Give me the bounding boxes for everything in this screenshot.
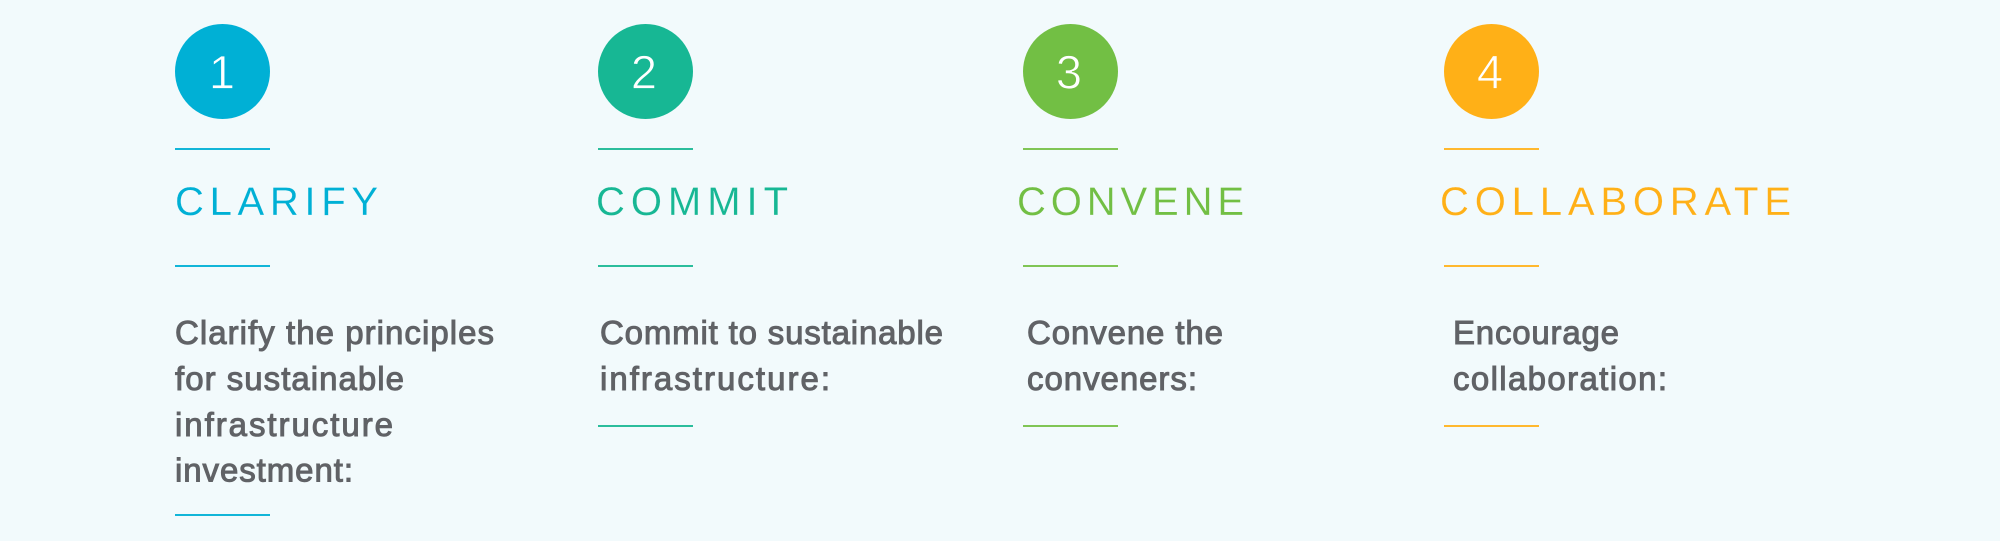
text: collaborate description: [1453, 314, 1667, 397]
panel: step 1 clarify: [175, 24, 494, 516]
text: commit description: Commit to sustainable: [600, 314, 943, 351]
icon: number 2 circle: 2: [631, 46, 657, 98]
heading: convene: CONVENE: [1017, 180, 1244, 224]
text: clarify description: infrastructure: [175, 406, 393, 443]
heading: commit: COMMIT: [596, 180, 788, 224]
panel: step 2 commit: [596, 24, 943, 427]
text: commit description: infrastructure:: [600, 360, 830, 397]
icon: number 4 circle: [1444, 24, 1539, 119]
text: collaborate description: Encourage: [1453, 314, 1619, 351]
text: convene description: conveners:: [1027, 360, 1197, 397]
text: commit description: [600, 314, 943, 397]
heading: clarify: CLARIFY: [175, 180, 378, 224]
text: clarify description: for sustainable: [175, 360, 404, 397]
text: clarify description: investment:: [175, 452, 353, 488]
icon: number 3 circle: 3: [1056, 46, 1082, 98]
heading: collaborate: COLLABORATE: [1440, 180, 1791, 224]
icon: number 3 circle: [1023, 24, 1118, 119]
text: collaborate description: collaboration:: [1453, 360, 1667, 397]
icon: number 2 circle: [598, 24, 693, 119]
text: convene description: [1027, 314, 1223, 397]
panel: step 4 collaborate: [1440, 24, 1791, 427]
panel: step 3 convene: [1017, 24, 1244, 427]
icon: number 4 circle: 4: [1477, 46, 1503, 98]
text: clarify description: [175, 314, 494, 488]
icon: number 1 circle: [175, 24, 270, 119]
text: convene description: Convene the: [1027, 314, 1223, 351]
icon: number 1 circle: 1: [209, 46, 235, 98]
text: clarify description: Clarify the principles: [175, 314, 494, 351]
